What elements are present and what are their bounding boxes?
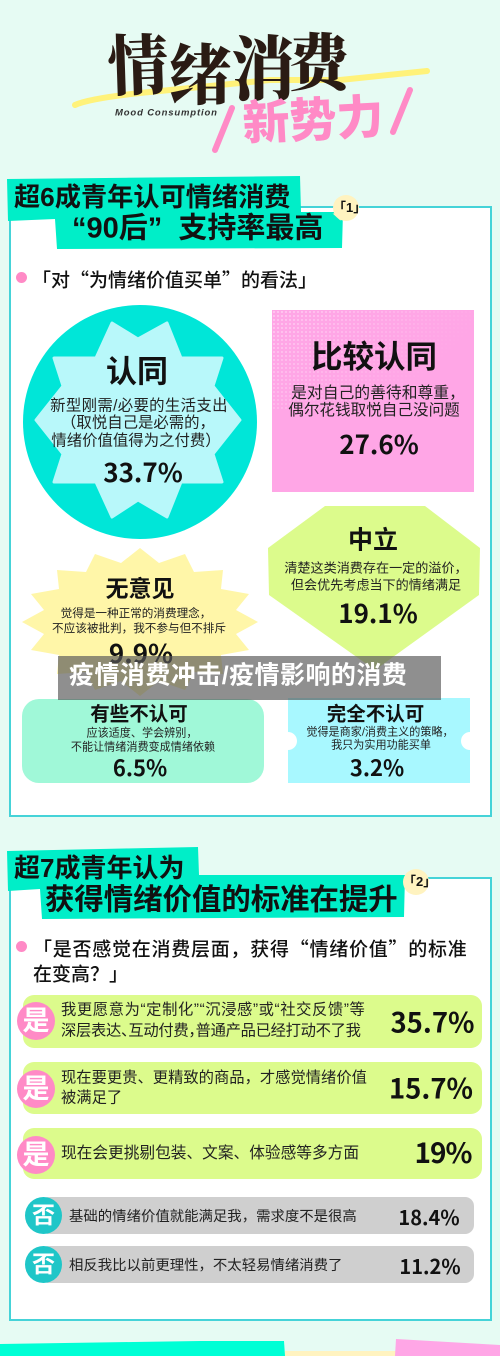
- icon: 否: 否: [32, 1251, 55, 1277]
- main title: 情: [106, 12, 170, 109]
- overlay banner: [58, 656, 441, 700]
- subheading: 「对“为情绪价值买单”的看法」: [32, 266, 317, 292]
- card: 完全不认可 3.2%: 我只为实用功能买单: [331, 739, 431, 751]
- card: 认同 33.7%: 认同: [106, 354, 168, 390]
- card: 无意见 9.9%: 9.9%: [109, 634, 173, 671]
- row: 是 35.7%: [23, 995, 482, 1048]
- card: 有些不认可 6.5%: 6.5%: [113, 751, 167, 783]
- card: 中立 19.1%: 清楚这类消费存在一定的溢价，: [284, 560, 468, 575]
- row: 是 19%: 19%: [414, 1132, 472, 1172]
- heading background: [7, 847, 405, 919]
- row: 是 15.7%: 15.7%: [389, 1066, 473, 1106]
- main title: 绪: [169, 23, 231, 118]
- row: 是 15.7%: [23, 1062, 482, 1114]
- row: 否 18.4%: [40, 1197, 474, 1234]
- row: 是 19%: 现在会更挑剔包装、文案、体验感等多方面: [61, 1145, 359, 1162]
- card: 完全不认可 3.2%: 3.2%: [350, 751, 404, 783]
- number badge: [403, 869, 429, 895]
- card: 认同 33.7%: 新型刚需/必要的生活支出: [50, 397, 228, 414]
- title block: [72, 12, 430, 153]
- next section header strip: [0, 1339, 500, 1356]
- main title: 费: [288, 14, 350, 103]
- card: 认同 33.7%: 情绪价值值得为之付费）: [51, 432, 221, 449]
- panel border: [9, 206, 492, 817]
- pink subtitle: 新势力: [241, 90, 385, 150]
- panel: section 2: [7, 847, 492, 1321]
- heading: [14, 853, 398, 916]
- row: 否 11.2%: [40, 1246, 474, 1283]
- card: 无意见 9.9%: 觉得是一种正常的消费理念，: [61, 607, 211, 620]
- card: 认同 33.7%: 33.7%: [103, 453, 183, 490]
- card: 认同 33.7%: （取悦自己是必需的，: [61, 414, 215, 431]
- icon: 否: 否: [32, 1202, 55, 1228]
- card: 完全不认可 3.2%: 完全不认可: [327, 703, 424, 725]
- card: 无意见 9.9%: 不应该被批判，我不参与但不排斥: [52, 622, 226, 635]
- row: 是 19%: [23, 1128, 482, 1179]
- card: 完全不认可 3.2%: [288, 698, 470, 783]
- number badge: 「2」: [403, 874, 436, 889]
- card: 比较认同 27.6%: [272, 310, 474, 492]
- number badge: 「1」: [333, 200, 366, 215]
- heading: “90后” 支持率最高: [72, 212, 323, 244]
- card: 无意见 9.9%: [22, 548, 258, 696]
- panel: section 1: [7, 176, 492, 817]
- heading background: [7, 176, 343, 249]
- english subtitle: Mood Consumption: [115, 107, 218, 118]
- row: 否 11.2%: 相反我比以前更理性，不太轻易情绪消费了: [69, 1258, 342, 1274]
- icon: 否: [25, 1246, 62, 1283]
- subheading: 「是否感觉在消费层面，获得“情绪价值”的标准: [33, 934, 468, 962]
- icon: 是: [17, 1070, 55, 1108]
- card: 中立 19.1%: [268, 506, 480, 670]
- icon: 是: [17, 1002, 55, 1040]
- heading: 超7成青年认为: [14, 853, 184, 883]
- card: 认同 33.7%: [23, 305, 257, 539]
- card: 比较认同 27.6%: 是对自己的善待和尊重，: [291, 385, 465, 402]
- main title: [106, 12, 350, 118]
- row: 是 35.7%: 我更愿意为“定制化”“沉浸感”或“社交反馈”等: [61, 1001, 365, 1018]
- number badge: [333, 195, 359, 221]
- row: 是 15.7%: 被满足了: [61, 1089, 122, 1106]
- icon: 否: [25, 1197, 62, 1234]
- card: 中立 19.1%: 19.1%: [338, 594, 418, 631]
- overlay banner: 疫情消费冲击/疫情影响的消费: [69, 662, 407, 690]
- row: 否 18.4%: 18.4%: [398, 1202, 460, 1231]
- card: 比较认同 27.6%: 27.6%: [339, 425, 419, 462]
- heading: 获得情绪价值的标准在提升: [45, 883, 398, 916]
- card: 比较认同 27.6%: 偶尔花钱取悦自己没问题: [288, 402, 460, 419]
- row: 是 35.7%: 35.7%: [390, 1000, 475, 1040]
- card: 比较认同 27.6%: 比较认同: [311, 338, 437, 374]
- card: 完全不认可 3.2%: 觉得是商家/消费主义的策略，: [306, 726, 454, 738]
- row: 否 11.2%: 11.2%: [399, 1251, 461, 1280]
- row: 否 18.4%: 基础的情绪价值就能满足我，需求度不是很高: [69, 1209, 357, 1225]
- icon: 是: 是: [22, 1006, 50, 1036]
- card: 有些不认可 6.5%: 不能让情绪消费变成情绪依赖: [71, 741, 215, 753]
- row: 是 35.7%: 深层表达、互动付费，普通产品已经打动不了我: [61, 1022, 361, 1039]
- icon: 是: 是: [22, 1140, 50, 1170]
- main title: 消: [232, 14, 294, 115]
- card: 有些不认可 6.5%: [22, 699, 264, 783]
- panel border: [9, 877, 492, 1321]
- subheading: [16, 934, 468, 986]
- icon: 是: 是: [22, 1074, 50, 1104]
- card: 有些不认可 6.5%: 应该适度、学会辨别，: [87, 727, 197, 739]
- heading: 超6成青年认可情绪消费: [14, 182, 290, 212]
- heading: [14, 182, 323, 244]
- subheading: 在变高？」: [33, 960, 128, 986]
- icon: 是: [17, 1136, 55, 1174]
- card: 无意见 9.9%: 无意见: [106, 576, 174, 602]
- card: 中立 19.1%: 但会优先考虑当下的情绪满足: [291, 577, 461, 592]
- row: 是 15.7%: 现在要更贵、更精致的商品，才感觉情绪价值: [61, 1069, 367, 1086]
- card: 中立 19.1%: 中立: [348, 526, 398, 554]
- card: 有些不认可 6.5%: 有些不认可: [90, 703, 188, 725]
